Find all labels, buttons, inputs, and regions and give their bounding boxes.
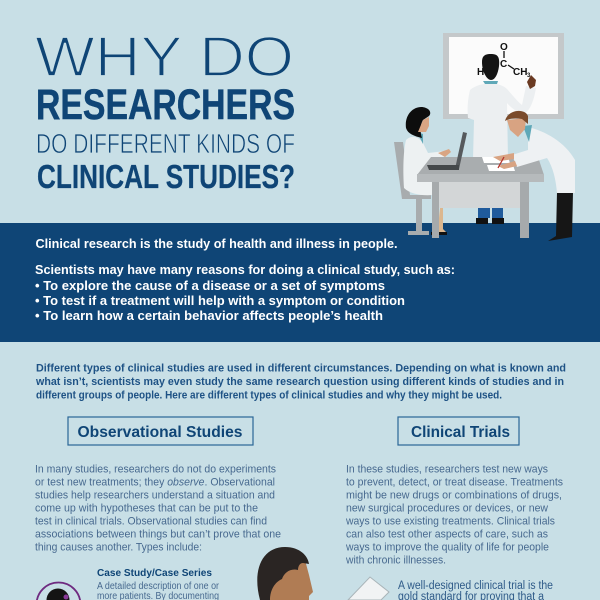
intro paragraph: what isn’t, scientists may even study the same research question using different kinds of studies and in	[35, 376, 564, 388]
chemical formula: O	[500, 42, 508, 53]
chemical formula: CH	[513, 67, 527, 78]
heading: clinical trials	[398, 417, 519, 445]
observational studies text: In many studies, researchers do not do experiments	[35, 464, 276, 476]
icon: clipboard	[348, 577, 389, 600]
laptop	[427, 132, 467, 170]
intro paragraph: Different types of clinical studies are used in different circumstances. Depending on what is known and	[36, 362, 566, 374]
observational studies text	[35, 464, 281, 554]
observational studies text: come up with hypotheses that can be put to the	[35, 502, 258, 514]
title	[35, 25, 295, 195]
icon: researcher head	[257, 547, 313, 600]
observational studies text: associations between things but can’t prove that one	[35, 528, 281, 540]
clinical trials text: ways to use existing treatments. Clinical trials	[345, 516, 555, 528]
clinical trials text: to prevent, detect, or treat disease. Treatments	[346, 476, 563, 488]
clinical trial callout: A well-designed clinical trial is the	[398, 580, 553, 592]
chemical formula: H	[477, 67, 484, 78]
chemical formula: 3	[527, 73, 531, 79]
case study text	[97, 581, 220, 600]
clinical trials text: can also test other aspects of care, such as	[346, 528, 548, 540]
clinical trials text: In these studies, researchers test new ways	[346, 464, 548, 476]
case study heading: Case Study/Case Series	[97, 567, 212, 579]
title: WHY DO	[35, 25, 294, 89]
heading: clinical trials: Clinical Trials	[411, 424, 510, 441]
title: RESEARCHERS	[36, 81, 295, 129]
leaning researcher	[493, 111, 575, 241]
whiteboard	[443, 33, 564, 119]
table	[417, 157, 544, 238]
band text: • To explore the cause of a disease or a set of symptoms	[35, 278, 385, 293]
illustration: researchers at whiteboard and table	[394, 33, 575, 241]
clinical trials text: ways to improve the quality of life for people	[345, 542, 549, 554]
clinical trials text: might be new drugs or combinations of drugs,	[346, 490, 562, 502]
band text: • To test if a treatment will help with a symptom or condition	[35, 293, 405, 308]
icon: case study portrait	[36, 582, 80, 600]
blue band	[0, 223, 600, 342]
intro paragraph: different groups of people. Here are different types of clinical studies and why they might be used.	[36, 390, 502, 402]
observational studies text: thing causes another. Types include:	[35, 542, 202, 554]
intro paragraph	[35, 362, 566, 402]
clinical trial callout	[398, 580, 553, 600]
title: CLINICAL STUDIES?	[37, 158, 295, 195]
chemical formula: C	[500, 59, 507, 70]
seated researcher with chair	[394, 107, 451, 235]
heading: observational studies: Observational Studies	[78, 424, 243, 441]
clinical trials text: new surgical procedures or devices, or new	[346, 502, 548, 514]
papers	[482, 157, 515, 171]
observational studies text: test in clinical trials. Observational studies can find	[35, 516, 267, 528]
chemical formula	[477, 42, 531, 79]
heading: observational studies	[68, 417, 253, 445]
band text: • To learn how a certain behavior affects people’s health	[35, 308, 383, 323]
title: DO DIFFERENT KINDS OF	[36, 128, 295, 159]
standing researcher	[468, 54, 536, 224]
band text: Scientists may have many reasons for doing a clinical study, such as:	[35, 262, 455, 277]
observational studies text: or test new treatments; they observe. Observational	[35, 476, 275, 488]
observational studies text: studies help researchers understand a situation and	[35, 490, 275, 502]
case study text: A detailed description of one or	[97, 581, 220, 592]
band text	[35, 236, 455, 323]
clinical trials text	[345, 464, 563, 566]
clinical trials text: with chronic illnesses.	[345, 554, 446, 566]
band text: Clinical research is the study of health and illness in people.	[36, 236, 398, 251]
